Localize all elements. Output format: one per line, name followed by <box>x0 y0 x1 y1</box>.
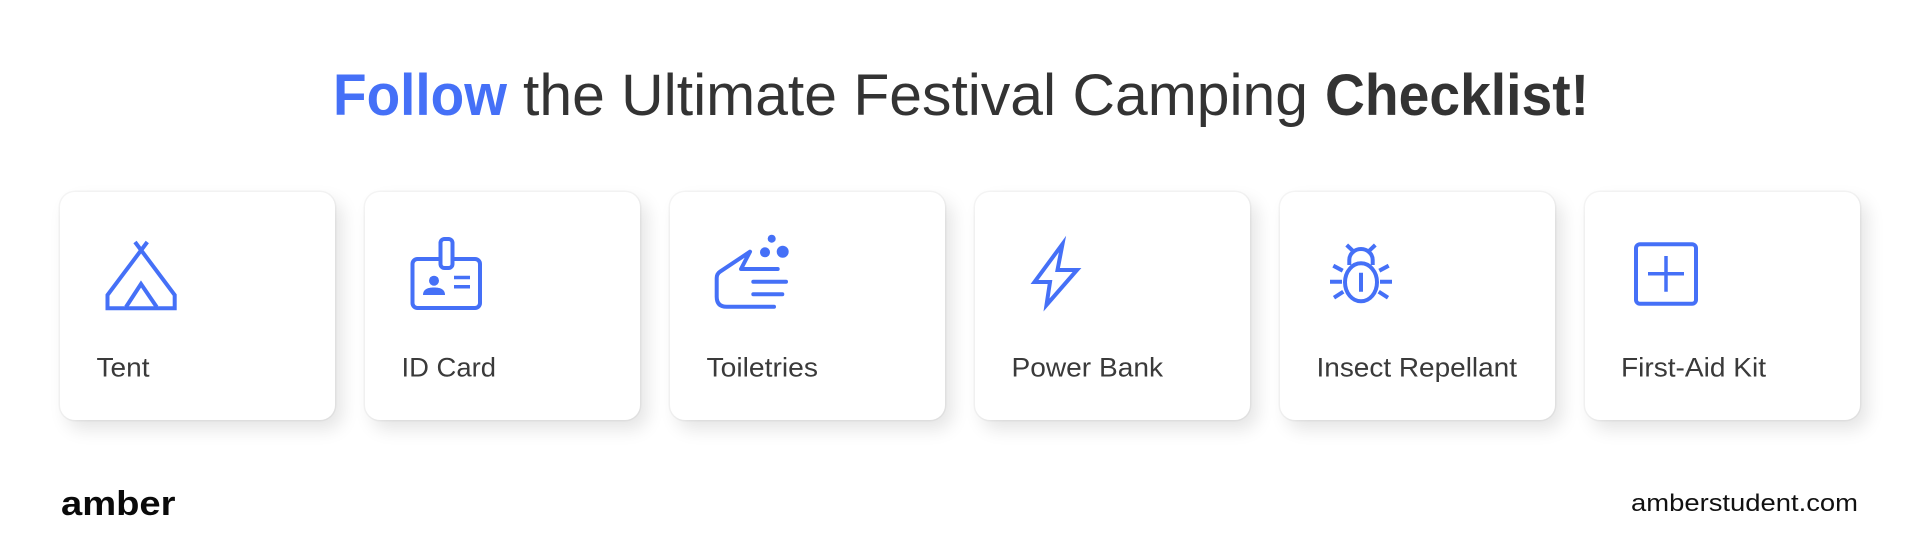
title: Follow <box>333 63 508 128</box>
website url: amberstudent.com <box>1631 490 1858 517</box>
label: id card: ID Card <box>402 352 496 382</box>
icon: first-aid <box>1636 244 1696 304</box>
label: tent: Tent <box>96 352 150 382</box>
icon: toiletries <box>717 235 789 307</box>
label: toiletries: Toiletries <box>706 352 818 382</box>
panel: tent <box>60 192 335 420</box>
icon: insect <box>1330 245 1392 301</box>
panel: toiletries <box>670 192 945 420</box>
icon: id card <box>412 239 480 308</box>
label: power bank: Power Bank <box>1012 352 1164 382</box>
panel: first-aid kit <box>1585 192 1860 420</box>
icon: tent <box>108 242 175 308</box>
panel: insect repellant <box>1280 192 1555 420</box>
title: Checklist! <box>1325 63 1589 128</box>
panel: id card <box>365 192 640 420</box>
logo: amber: amber <box>61 485 176 523</box>
label: insect repellant: Insect Repellant <box>1316 352 1518 382</box>
title: the Ultimate Festival Camping <box>523 63 1308 128</box>
title <box>333 63 1589 128</box>
panel: power bank <box>975 192 1250 420</box>
icon: lightning bolt <box>1034 244 1077 305</box>
label: first-aid kit: First-Aid Kit <box>1621 352 1767 382</box>
